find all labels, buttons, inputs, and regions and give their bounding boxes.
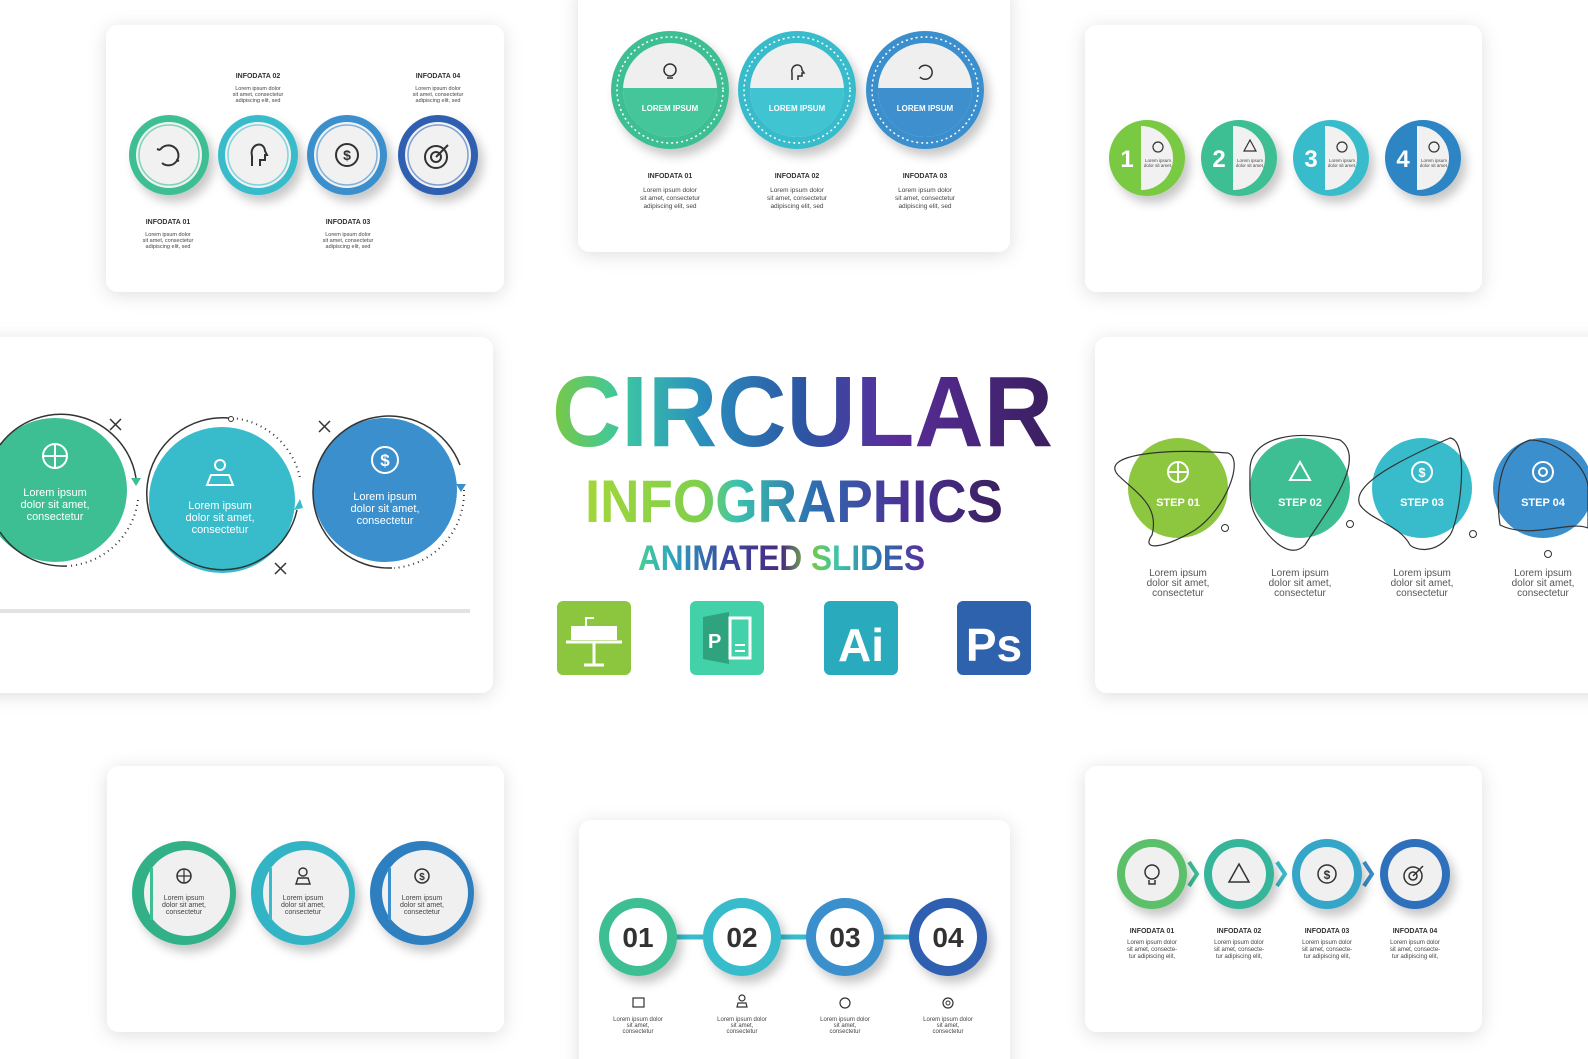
icons and texts: sit amet, [937, 1023, 960, 1029]
circle 3 [307, 115, 387, 195]
circle 2 [147, 416, 303, 573]
icons and texts: consectetur [726, 1029, 758, 1035]
labels: INFODATA 02 [1217, 928, 1261, 935]
labels: Lorem ipsum dolor [770, 187, 825, 194]
labels: INFODATA 02 [775, 173, 819, 180]
circle 2: Lorem ipsum [283, 895, 323, 902]
step texts: consectetur [1517, 588, 1570, 599]
circle 1 [1117, 839, 1187, 909]
icons and texts: sit amet, [627, 1023, 650, 1029]
panel: top-left infodata [106, 25, 504, 292]
icons and texts: Lorem ipsum dolor [613, 1017, 663, 1023]
circle 1 [132, 841, 236, 945]
circle 2: dolor sit amet, [185, 512, 255, 524]
cross marks [110, 419, 330, 574]
labels: adipiscing elit, sed [643, 203, 697, 210]
title: CIRCULAR [552, 356, 1053, 468]
circle 2: LOREM IPSUM [769, 104, 826, 113]
circle 3: dolor sit amet, [350, 503, 420, 515]
labels [143, 73, 464, 250]
circle 3 [1292, 839, 1362, 909]
labels: sit amet, consecte- [1390, 947, 1440, 953]
labels: sit amet, consectetur [767, 195, 828, 202]
icon: illustrator: Ai [838, 619, 884, 671]
step 02: STEP 02 [1278, 497, 1322, 509]
step 2: dolor sit amet, [1236, 163, 1264, 168]
labels: sit amet, consectetur [323, 238, 374, 244]
labels: Lorem ipsum dolor [325, 232, 371, 238]
circle 2: dolor sit amet, [281, 902, 325, 909]
labels: INFODATA 04 [416, 73, 460, 80]
circle 3 [370, 841, 474, 945]
step texts: Lorem ipsum [1393, 568, 1451, 579]
circle 3: $ [419, 872, 425, 883]
labels: Lorem ipsum dolor [898, 187, 953, 194]
step 2: Lorem ipsum [1237, 158, 1263, 163]
step 01: STEP 01 [1156, 497, 1200, 509]
labels: Lorem ipsum dolor [643, 187, 698, 194]
icons and texts: sit amet, [731, 1023, 754, 1029]
circle 3 [866, 31, 984, 149]
circle 1: consectetur [166, 909, 203, 916]
step texts: dolor sit amet, [1391, 578, 1453, 589]
labels: sit amet, consectetur [413, 92, 464, 98]
labels: Lorem ipsum dolor [145, 232, 191, 238]
circle 2: consectetur [192, 524, 249, 536]
step 4 [1385, 120, 1461, 196]
step texts: consectetur [1152, 588, 1205, 599]
step texts: consectetur [1396, 588, 1449, 599]
labels: tur adipiscing elit, [1216, 954, 1263, 960]
labels: INFODATA 03 [1305, 928, 1349, 935]
icons and texts: Lorem ipsum dolor [820, 1017, 870, 1023]
step 4: dolor sit amet, [1420, 163, 1448, 168]
step 03: STEP 03 [1400, 497, 1444, 509]
title [552, 356, 1053, 578]
labels: sit amet, consecte- [1127, 947, 1177, 953]
icon: keynote [557, 601, 631, 675]
labels: sit amet, consecte- [1302, 947, 1352, 953]
icon: illustrator [824, 601, 898, 675]
chevrons [1189, 862, 1372, 886]
circle 03 [806, 898, 884, 976]
step texts [1147, 568, 1574, 599]
labels: Lorem ipsum dolor [1127, 940, 1177, 946]
step texts: Lorem ipsum [1149, 568, 1207, 579]
panel: top-right numbered circles [1085, 25, 1482, 292]
step 04: STEP 04 [1521, 497, 1566, 509]
circle 3: $ [343, 147, 351, 163]
icons and texts [613, 995, 973, 1035]
circle 03: 03 [829, 922, 861, 953]
labels: tur adipiscing elit, [1129, 954, 1176, 960]
labels [640, 173, 956, 210]
connectors [676, 934, 910, 940]
circle 04 [909, 898, 987, 976]
circle 1 [0, 414, 141, 566]
step 1 [1109, 120, 1185, 196]
icon: powerpoint [690, 601, 764, 675]
labels: INFODATA 04 [1393, 928, 1437, 935]
panel: top-middle lorem ipsum circles [578, 0, 1010, 252]
labels: sit amet, consectetur [640, 195, 701, 202]
icons and texts: Lorem ipsum dolor [923, 1017, 973, 1023]
labels: adipiscing elit, sed [146, 244, 190, 250]
step 2 [1201, 120, 1277, 196]
circle 02: 02 [726, 922, 758, 953]
icon: photoshop [957, 601, 1031, 675]
step 01 [1115, 438, 1234, 546]
panel: bottom-middle numbered chain [579, 820, 1010, 1059]
icons and texts: consectetur [622, 1029, 654, 1035]
circle 1 [611, 31, 729, 149]
labels: sit amet, consecte- [1214, 947, 1264, 953]
labels: Lorem ipsum dolor [1390, 940, 1440, 946]
labels: sit amet, consectetur [895, 195, 956, 202]
title: INFOGRAPHICS [585, 468, 1003, 535]
labels: adipiscing elit, sed [898, 203, 952, 210]
step 03: $ [1418, 465, 1426, 480]
step 3: 3 [1304, 146, 1318, 173]
labels: Lorem ipsum dolor [415, 86, 461, 92]
step 1: Lorem ipsum [1145, 158, 1171, 163]
icon: photoshop: Ps [966, 619, 1022, 671]
circle 1 [129, 115, 209, 195]
step 3 [1293, 120, 1369, 196]
circle 3: consectetur [404, 909, 441, 916]
step 3: dolor sit amet, [1328, 163, 1356, 168]
circle 1: dolor sit amet, [20, 499, 90, 511]
labels: INFODATA 01 [146, 219, 190, 226]
labels: INFODATA 01 [648, 173, 692, 180]
icons and texts: sit amet, [834, 1023, 857, 1029]
panel: bottom-left ring circles [107, 766, 504, 1032]
step texts: Lorem ipsum [1271, 568, 1329, 579]
labels: INFODATA 02 [236, 73, 280, 80]
labels: tur adipiscing elit, [1304, 954, 1351, 960]
circle 1: Lorem ipsum [164, 895, 204, 902]
step 03 [1359, 438, 1476, 549]
circle 3: dolor sit amet, [400, 902, 444, 909]
labels: adipiscing elit, sed [326, 244, 370, 250]
labels: INFODATA 03 [326, 219, 370, 226]
labels: adipiscing elit, sed [416, 98, 460, 104]
circle 1: LOREM IPSUM [642, 104, 699, 113]
circle 2 [251, 841, 355, 945]
step texts: consectetur [1274, 588, 1327, 599]
panel: bottom-right process [1085, 766, 1482, 1032]
labels: Lorem ipsum dolor [235, 86, 281, 92]
circle 02 [703, 898, 781, 976]
circle 1: consectetur [27, 511, 84, 523]
icons and texts: Lorem ipsum dolor [717, 1017, 767, 1023]
circle 3: consectetur [357, 515, 414, 527]
step 4: Lorem ipsum [1421, 158, 1447, 163]
circle 3: LOREM IPSUM [897, 104, 954, 113]
step 3: Lorem ipsum [1329, 158, 1355, 163]
circle 3: $ [380, 451, 390, 470]
labels: sit amet, consectetur [143, 238, 194, 244]
icon: powerpoint: P [708, 631, 721, 653]
labels: Lorem ipsum dolor [1302, 940, 1352, 946]
circle 3: Lorem ipsum [353, 491, 417, 503]
labels: INFODATA 03 [903, 173, 947, 180]
circle 4 [1380, 839, 1450, 909]
labels: INFODATA 01 [1130, 928, 1174, 935]
shadow line [0, 609, 470, 613]
icons and texts: consectetur [932, 1029, 964, 1035]
labels [1127, 928, 1440, 960]
circle 1: dolor sit amet, [162, 902, 206, 909]
step 2: 2 [1212, 146, 1226, 173]
labels: tur adipiscing elit, [1392, 954, 1439, 960]
labels: sit amet, consectetur [233, 92, 284, 98]
labels: adipiscing elit, sed [236, 98, 280, 104]
circle 2 [1204, 839, 1274, 909]
circle 3 [313, 416, 466, 568]
circle 04: 04 [932, 922, 964, 953]
circle 2: consectetur [285, 909, 322, 916]
step texts: Lorem ipsum [1514, 568, 1572, 579]
icons and texts: consectetur [829, 1029, 861, 1035]
step 4: 4 [1396, 146, 1410, 173]
step 02 [1250, 435, 1354, 550]
circle 2: Lorem ipsum [188, 500, 252, 512]
step 1: 1 [1120, 146, 1134, 173]
circle 01 [599, 898, 677, 976]
circle 3: Lorem ipsum [402, 895, 442, 902]
step 1: dolor sit amet, [1144, 163, 1172, 168]
circle 01: 01 [622, 922, 654, 953]
title: ANIMATED SLIDES [638, 539, 925, 578]
circle 2 [218, 115, 298, 195]
step 04 [1493, 438, 1588, 558]
labels: Lorem ipsum dolor [1214, 940, 1264, 946]
labels: adipiscing elit, sed [770, 203, 824, 210]
step texts: dolor sit amet, [1147, 578, 1209, 589]
circle 2 [738, 31, 856, 149]
step texts: dolor sit amet, [1269, 578, 1331, 589]
circle 3: $ [1324, 868, 1331, 882]
circle 4 [398, 115, 478, 195]
panel: middle-left arrow circles [0, 337, 493, 693]
panel: middle-right steps [1095, 337, 1588, 693]
circle 1: Lorem ipsum [23, 487, 87, 499]
step texts: dolor sit amet, [1512, 578, 1574, 589]
